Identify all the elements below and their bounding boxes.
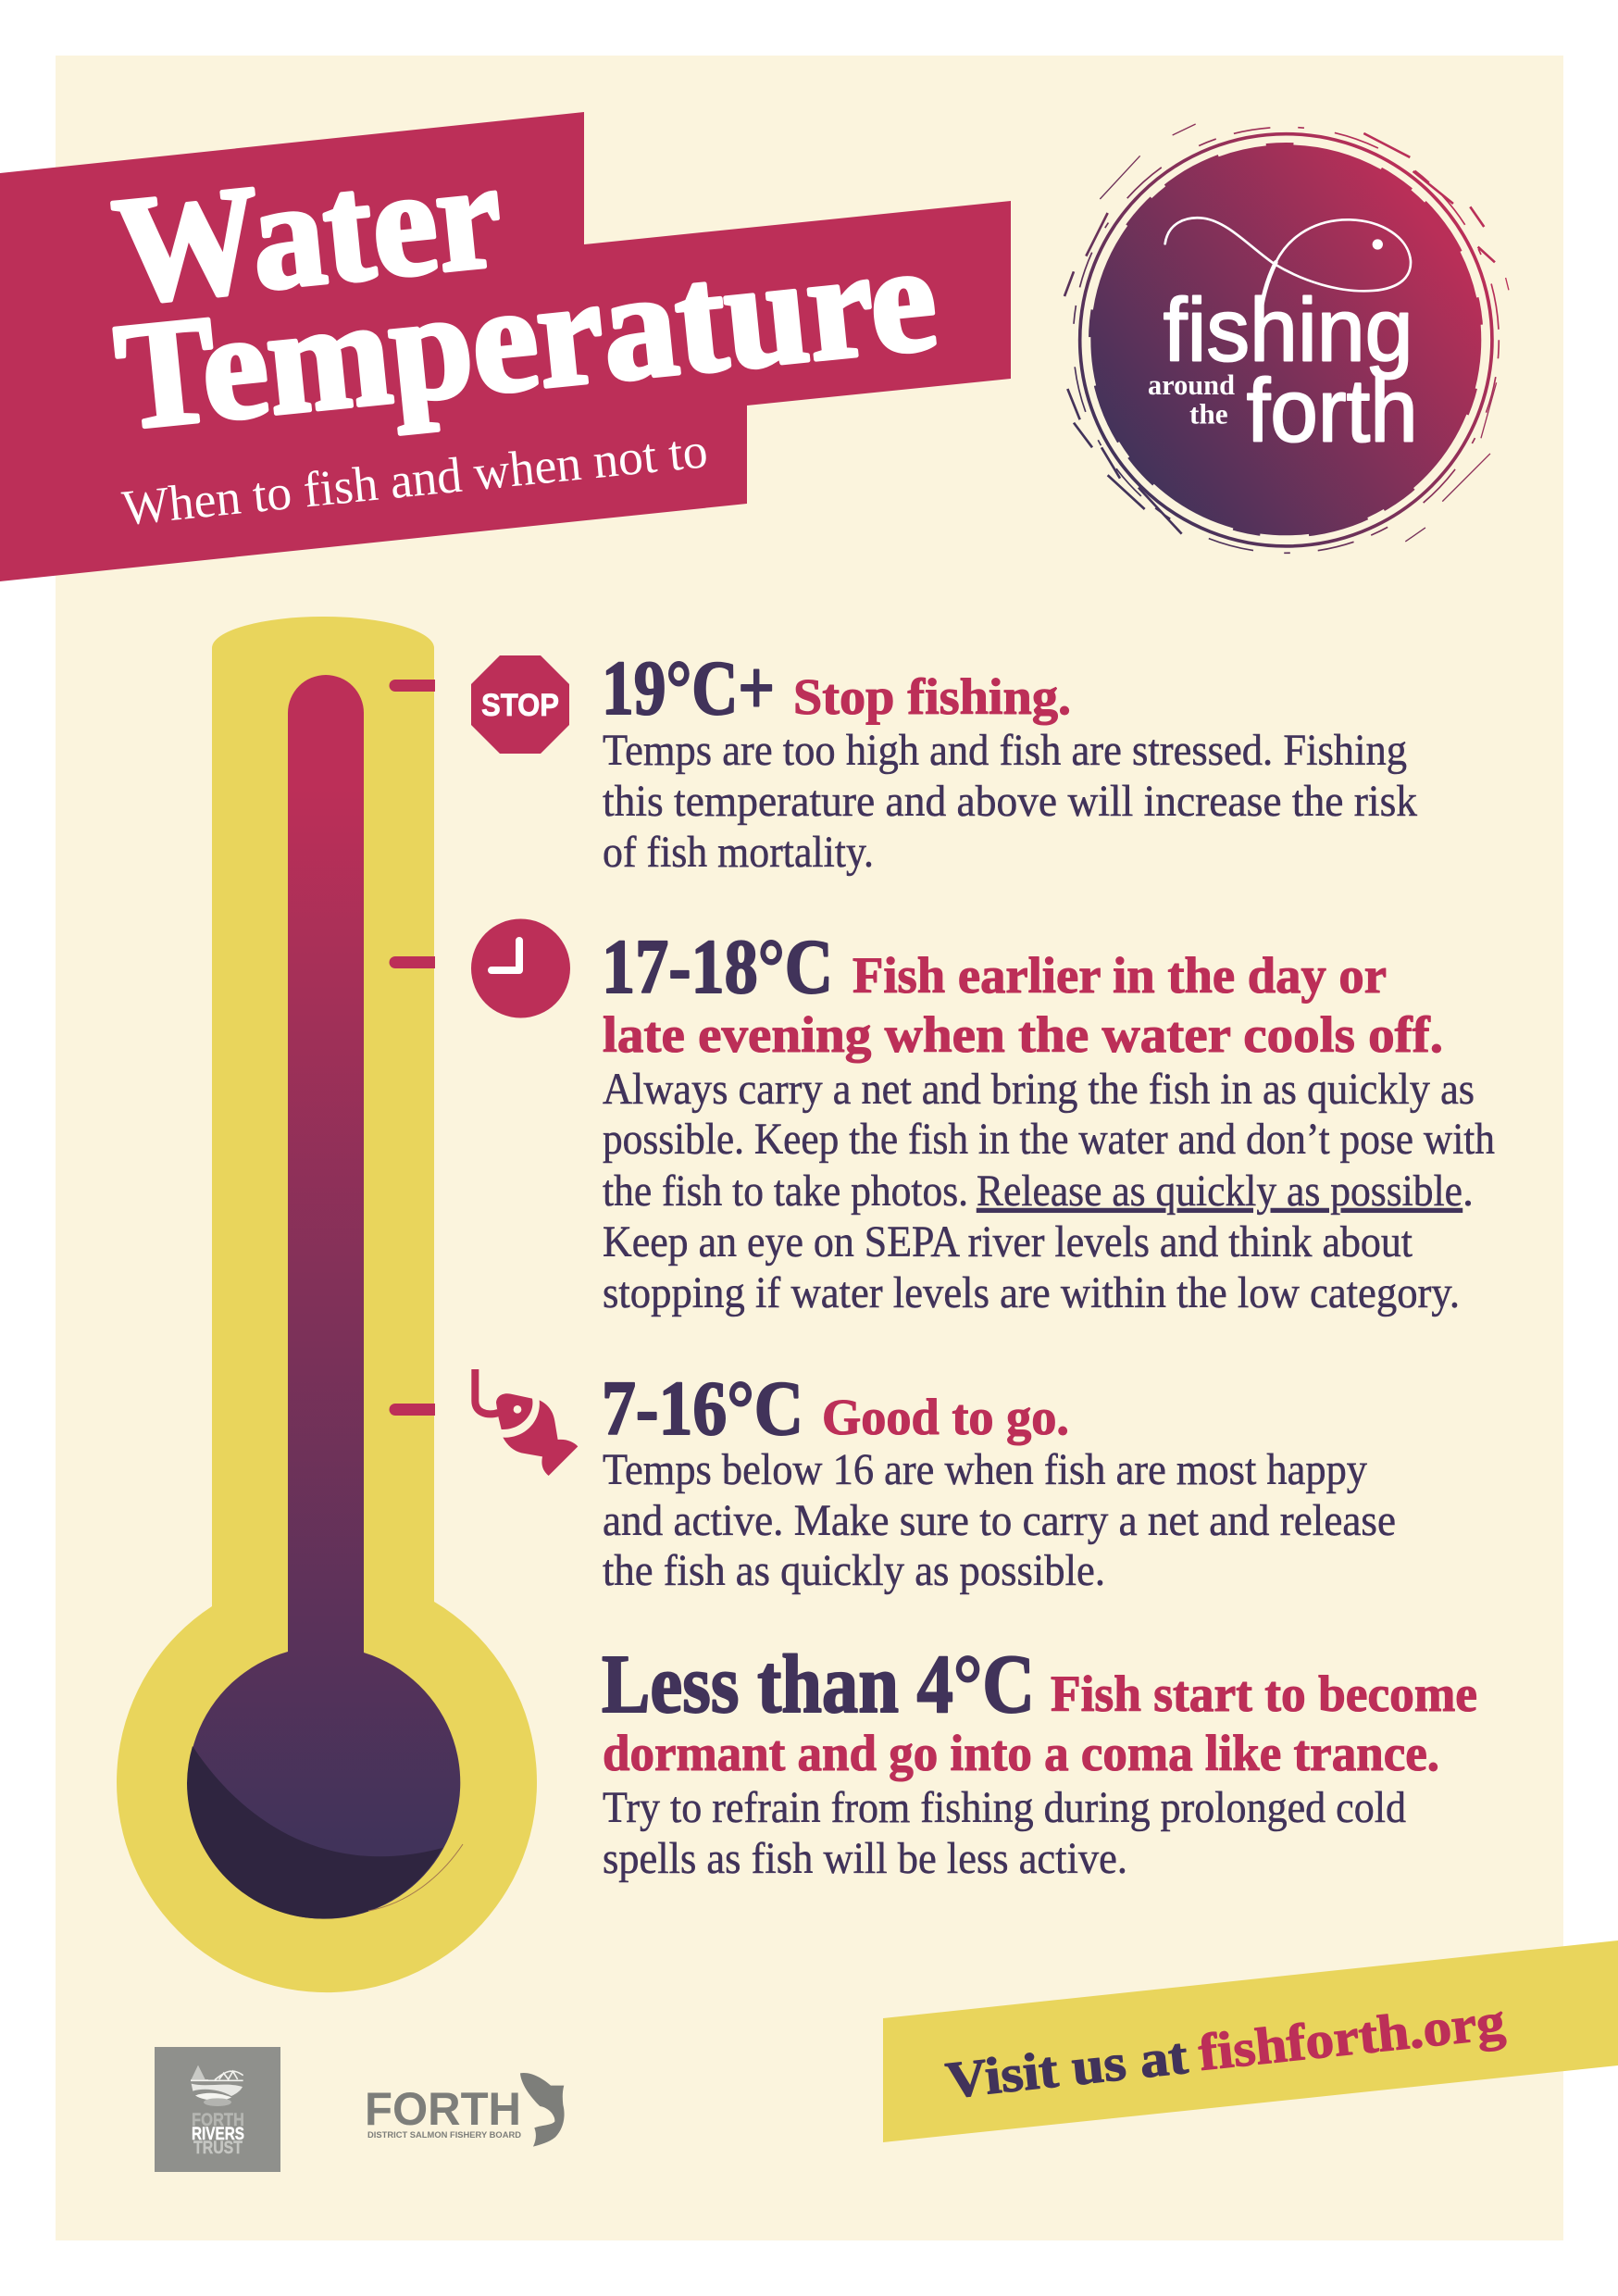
subtitle: When to fish and when not to	[119, 422, 710, 536]
text: Trust: TRUST	[193, 2139, 243, 2158]
brush ring	[1064, 124, 1509, 553]
body text: spells as fish will be less active.	[603, 1834, 1127, 1883]
body text: of fish mortality.	[603, 828, 874, 877]
body text: Temps below 16 are when fish are most happy	[603, 1445, 1367, 1494]
section: 7-16C good to go	[475, 1366, 1396, 1595]
heading 17-18C: 17-18°C	[602, 924, 833, 1010]
body text: Always carry a net and bring the fish in as quickly as	[603, 1065, 1475, 1114]
logo word: fishing: fishing	[1164, 281, 1413, 380]
logo word: around: around	[1148, 369, 1235, 401]
mercury column and bulb	[188, 675, 460, 1919]
heading fish start to become: Fish start to become	[1051, 1666, 1477, 1722]
logo word: the: the	[1189, 398, 1228, 430]
website banner	[883, 1940, 1618, 2142]
logo: Forth District Salmon Fishery Board	[365, 2073, 565, 2147]
heading good to go: Good to go.	[822, 1389, 1069, 1445]
title banner	[0, 112, 1011, 581]
fish outline	[1165, 218, 1411, 324]
bulb shadow	[187, 1746, 442, 1919]
body text	[603, 726, 1417, 877]
thermometer	[117, 617, 537, 1992]
body text: stopping if water levels are within the low category.	[603, 1268, 1460, 1317]
body text	[603, 1065, 1495, 1317]
text: Forth: FORTH	[192, 2111, 244, 2130]
text: Rivers: RIVERS	[192, 2125, 244, 2144]
body text: .	[1462, 1167, 1474, 1216]
icon: salmon	[520, 2073, 565, 2147]
text: district board: DISTRICT SALMON FISHERY BOARD	[367, 2130, 521, 2140]
text: FORTH: FORTH	[365, 2083, 521, 2135]
body text: and active. Make sure to carry a net and release	[603, 1496, 1396, 1545]
tick marks	[389, 680, 435, 1416]
logo disc	[1089, 143, 1484, 538]
logo word: forth: forth	[1247, 362, 1418, 461]
title: Water: Water	[106, 129, 509, 336]
river and bridge emblem	[191, 2065, 243, 2106]
section: 17-18C fish earlier: late evening when the water cools off.	[603, 1006, 1443, 1063]
heading less than 4C: Less than 4°C	[602, 1639, 1035, 1730]
text: Visit us at: Visit us at	[943, 2028, 1190, 2110]
icon: stop sign	[471, 655, 569, 754]
heading fish earlier: Fish earlier in the day or	[853, 947, 1387, 1004]
section: 17-18C fish earlier	[471, 918, 1495, 1317]
body text	[603, 1783, 1406, 1883]
text: fishforth.org: fishforth.org	[1196, 1993, 1508, 2082]
section: less than 4C	[602, 1639, 1477, 1883]
icon: fish on hook	[475, 1369, 578, 1476]
body text: Keep an eye on SEPA river levels and think about	[603, 1217, 1413, 1267]
logo: fishing around the forth	[1064, 124, 1509, 553]
body text: Temps are too high and fish are stressed. Fishing	[603, 726, 1407, 775]
body text: this temperature and above will increase the risk	[603, 777, 1417, 826]
body text	[603, 1445, 1396, 1595]
icon: clock	[471, 918, 570, 1018]
heading stop fishing: Stop fishing.	[793, 668, 1071, 725]
logo: Forth Rivers Trust	[155, 2047, 280, 2172]
body text: the fish to take photos.	[603, 1167, 968, 1216]
heading 19C+: 19°C+	[602, 645, 775, 731]
section: 19C+ stop fishing	[471, 645, 1417, 877]
icon: stop sign: STOP	[481, 688, 559, 723]
body text: possible. Keep the fish in the water and don’t pose with	[603, 1115, 1495, 1164]
thermometer casing	[117, 617, 537, 1992]
heading 7-16C: 7-16°C	[602, 1366, 803, 1452]
body text: Release as quickly as possible	[977, 1167, 1462, 1216]
body text: the fish as quickly as possible.	[603, 1546, 1105, 1595]
body text: Try to refrain from fishing during prolonged cold	[603, 1783, 1406, 1832]
section: less than 4C: dormant and go into a coma like trance.	[603, 1725, 1439, 1781]
bulb highlight line	[368, 1844, 463, 1911]
title: Temperature: Temperature	[108, 212, 943, 462]
